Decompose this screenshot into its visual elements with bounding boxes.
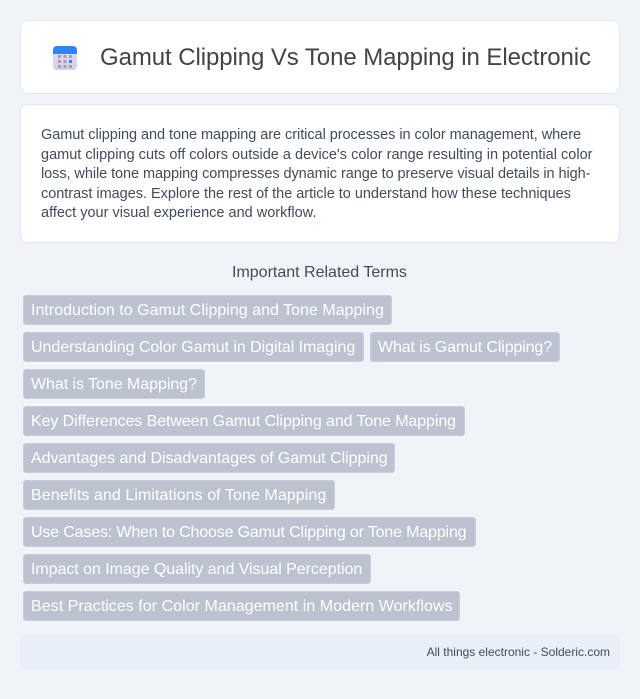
chip: gamut clipping xyxy=(370,332,560,362)
intro paragraph: affect your visual experience and workflow. xyxy=(41,205,316,221)
chip: gamut clipping: What is Gamut Clipping? xyxy=(378,339,552,356)
panel: title card xyxy=(20,20,620,94)
chip: impact: Impact on Image Quality and Visual Perception xyxy=(31,561,362,578)
chip: impact xyxy=(23,554,371,584)
chip: advantages: Advantages and Disadvantages of Gamut Clipping xyxy=(31,450,388,467)
intro paragraph: contrast images. Explore the rest of the article to understand how these techniques xyxy=(41,186,571,202)
chip: tone mapping xyxy=(23,369,205,399)
chip: benefits xyxy=(23,480,335,510)
chip: tone mapping: What is Tone Mapping? xyxy=(31,376,197,393)
intro paragraph: gamut clipping cuts off colors outside a device's color range resulting in potential color xyxy=(41,146,592,162)
chip: advantages xyxy=(23,443,395,473)
chip: key differences xyxy=(23,406,465,436)
intro paragraph: Gamut clipping and tone mapping are critical processes in color management, where xyxy=(41,127,581,143)
heading: related terms: Important Related Terms xyxy=(232,264,407,281)
icon: calendar xyxy=(53,46,77,70)
chip: benefits: Benefits and Limitations of Tone Mapping xyxy=(31,487,326,504)
intro paragraph xyxy=(41,127,592,221)
chip: best practices: Best Practices for Color Management in Modern Workflows xyxy=(31,598,453,615)
chip: best practices xyxy=(23,591,460,621)
footer text: All things electronic - Solderic.com xyxy=(427,645,610,659)
title: Gamut Clipping Vs Tone Mapping in Electronic xyxy=(100,44,591,71)
footer xyxy=(20,635,620,669)
chip: key differences: Key Differences Between Gamut Clipping and Tone Mapping xyxy=(31,413,456,430)
chip: use cases xyxy=(23,517,476,547)
chip: use cases: Use Cases: When to Choose Gamut Clipping or Tone Mapping xyxy=(31,524,466,541)
intro paragraph: loss, while tone mapping compresses dynamic range to preserve visual details in high- xyxy=(41,166,590,182)
chip: color gamut: Understanding Color Gamut in Digital Imaging xyxy=(31,339,355,356)
panel: intro text card xyxy=(20,104,620,243)
chip: introduction xyxy=(23,295,392,325)
chip: introduction: Introduction to Gamut Clipping and Tone Mapping xyxy=(31,302,384,319)
chip: color gamut xyxy=(23,332,364,362)
